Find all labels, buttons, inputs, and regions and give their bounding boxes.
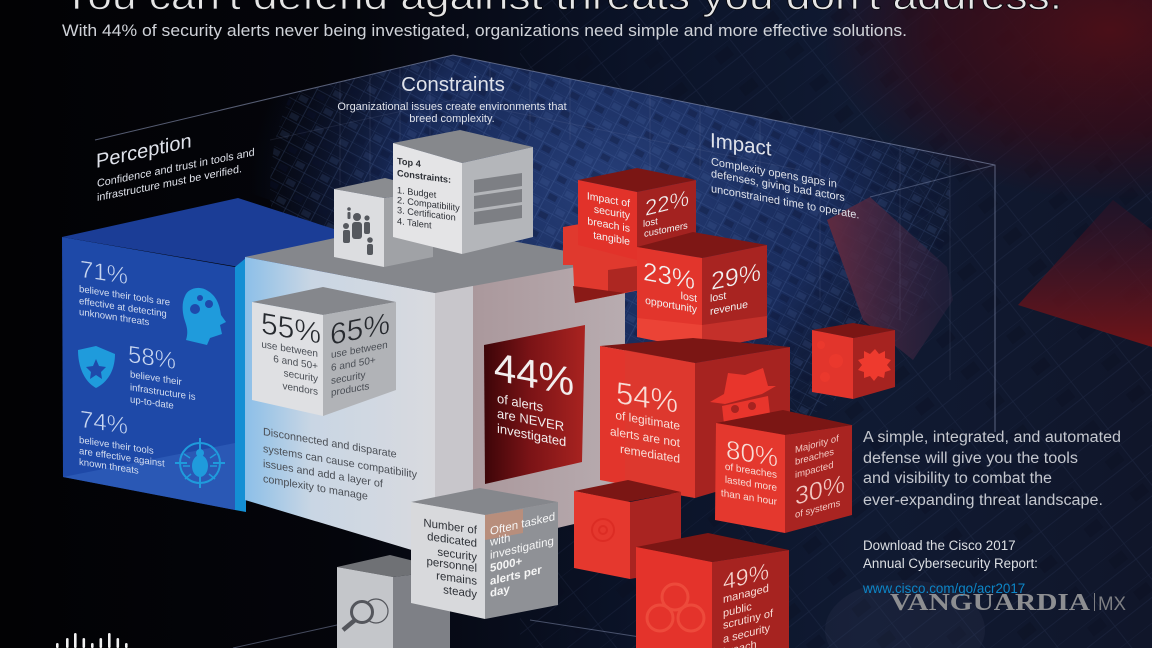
stat: 49%: a security <box>723 622 770 646</box>
stat: 23% <box>643 256 698 316</box>
closing statement: and visibility to combat the <box>863 470 1052 487</box>
cube: magnifier <box>337 555 450 648</box>
impact text: breach is <box>587 215 630 235</box>
cube: 49% <box>636 533 789 648</box>
stat: 71%: 71% <box>80 256 128 290</box>
stat: 65% <box>330 307 390 399</box>
personnel text <box>423 518 478 601</box>
stat: 80%: lasted more <box>725 475 777 494</box>
background <box>270 0 1152 648</box>
icon: bug in target <box>175 438 225 488</box>
stat: 29%: revenue <box>710 298 748 318</box>
stat: 55%: security <box>284 368 319 385</box>
callout: 44% of alerts: investigated <box>497 421 566 449</box>
stat: 71%: unknown threats <box>79 307 150 328</box>
body text: Disconnected and disparate <box>263 426 397 461</box>
stat: 80%: than an hour <box>721 488 778 508</box>
personnel text: dedicated <box>427 531 477 550</box>
stat: 74%: 74% <box>80 406 128 440</box>
stat: 23%: lost <box>681 290 697 305</box>
stat: 74%: believe their tools <box>79 435 154 457</box>
cube: 23% and 29% <box>637 232 767 350</box>
wireframe room <box>95 55 995 648</box>
stat: 54%: remediated <box>620 442 680 466</box>
stat: 23%: 23% <box>643 256 695 295</box>
stat: 30%: 30% <box>795 470 845 511</box>
stat: 54%: alerts are not <box>610 424 681 450</box>
body text: systems can cause compatibility <box>263 443 418 481</box>
icon: magnifier over brain <box>343 599 388 630</box>
stat: 71%: effective at detecting <box>79 296 167 320</box>
stat: 30%: of systems <box>795 498 840 521</box>
stat: 74% <box>79 406 165 481</box>
stat: 65%: 6 and 50+ <box>331 355 376 374</box>
list text: 4. Talent <box>397 216 432 231</box>
icon: spy <box>710 368 776 424</box>
stat: 30% <box>795 433 845 521</box>
stat: 29% <box>710 258 761 318</box>
personnel text: security <box>437 546 477 564</box>
heading: impact: unconstrained time to operate. <box>711 183 859 222</box>
stat: 55%: 55% <box>261 307 321 351</box>
stat: 80%: 80% <box>726 434 778 473</box>
closing statement: ever-expanding threat landscape. <box>863 492 1103 509</box>
callout: 44% of alerts: of alerts <box>497 391 544 415</box>
list text <box>397 156 460 234</box>
stat: 74%: known threats <box>79 457 139 477</box>
body text: complexity to manage <box>263 473 368 503</box>
stat: 65%: use between <box>331 340 388 361</box>
download call to action: www.cisco.com/go/acr2017 <box>862 581 1025 596</box>
personnel text: personnel <box>427 556 477 575</box>
stat: 65%: 65% <box>330 307 390 352</box>
impact text <box>587 190 631 248</box>
stat: 29%: 29% <box>711 258 761 296</box>
heading: constraints: Organizational issues create environments that <box>337 101 567 113</box>
tasked text: investigating <box>490 534 554 562</box>
cisco logo <box>56 633 128 648</box>
stat: 55%: 6 and 50+ <box>273 354 318 372</box>
stat: 58%: up-to-date <box>130 394 174 412</box>
heading: constraints: Constraints <box>401 73 505 96</box>
panel: perception blue cube <box>62 198 337 512</box>
personnel text: Number of <box>423 518 478 537</box>
icon: server racks <box>474 173 522 225</box>
stat: 80% <box>721 434 778 508</box>
body text: issues and add a layer of <box>263 458 384 491</box>
panel: constraints big cube <box>245 222 625 557</box>
personnel text: steady <box>443 584 477 601</box>
stat: 49%: 49% <box>723 558 769 595</box>
tasked text: with <box>489 531 510 549</box>
heading: impact: Complexity opens gaps in <box>711 156 837 191</box>
heading: impact <box>710 129 859 222</box>
closing statement <box>863 429 1121 509</box>
stat: 80%: of breaches <box>725 462 777 481</box>
callout: 44% of alerts <box>484 325 585 484</box>
cube: 54% <box>600 338 790 498</box>
tasked text: day <box>490 582 510 600</box>
list text: 3. Certification <box>397 205 456 223</box>
cube: virus <box>812 323 895 399</box>
stat: 71% <box>79 256 170 332</box>
icon: people group <box>343 207 373 255</box>
stat: 29%: lost <box>710 290 726 305</box>
list text: Constraints: <box>397 168 451 185</box>
heading: constraints: breed complexity. <box>409 113 495 125</box>
tasked text: alerts per <box>490 563 542 588</box>
closing statement: A simple, integrated, and automated <box>863 429 1121 446</box>
tasked text: Often tasked <box>490 510 555 538</box>
stat: 30%: impacted <box>795 460 833 481</box>
stat: 58%: 58% <box>128 341 176 375</box>
impact text: Impact of <box>587 190 630 210</box>
cube: top 4 constraints <box>393 130 533 254</box>
heading: perception: Perception <box>96 130 192 173</box>
stat: 54%: of legitimate <box>615 408 680 433</box>
download call to action: Download the Cisco 2017 <box>863 538 1016 553</box>
cube: empty red <box>574 480 681 579</box>
list text: 2. Compatibility <box>397 195 460 213</box>
tasked text: 5000+ <box>490 555 522 575</box>
stat: 22%: customers <box>644 220 688 240</box>
impact text: security <box>594 204 631 222</box>
stat: 58%: infrastructure is <box>130 382 196 403</box>
cube: personnel <box>411 488 558 619</box>
stat: 54% <box>610 375 681 466</box>
stat: 58% <box>128 341 196 415</box>
stat: 49%: public <box>723 601 752 620</box>
download call to action <box>862 538 1038 596</box>
cube: people <box>334 178 433 267</box>
stat: 22% <box>643 185 689 240</box>
stat: 23%: opportunity <box>645 295 698 316</box>
icon: faint biohazard <box>592 519 614 541</box>
watermark: MX <box>1098 594 1126 615</box>
stat: 22%: 22% <box>645 185 689 221</box>
heading: impact: defenses, giving bad actors <box>711 168 845 204</box>
heading: impact: Impact <box>710 129 772 161</box>
stat: 55% <box>261 307 321 398</box>
icon: biohazard <box>647 584 704 631</box>
stat: 74%: are effective against <box>79 446 165 470</box>
tasked text <box>489 510 555 600</box>
heading: perception <box>96 130 255 204</box>
body text <box>263 426 418 511</box>
watermark: VANGUARDIA <box>890 589 1090 616</box>
stat: 49% <box>723 557 774 648</box>
heading: perception: infrastructure must be verified. <box>97 163 242 204</box>
closing statement: defense will give you the tools <box>863 450 1078 467</box>
stat: 65%: security <box>331 370 366 387</box>
icon: shield with star <box>78 346 115 388</box>
stat: 22%: lost <box>643 216 658 230</box>
icon: malware <box>817 341 891 382</box>
personnel text: remains <box>436 570 477 588</box>
stat: 58%: believe their <box>130 369 182 388</box>
stat: 54%: 54% <box>616 375 678 420</box>
download call to action: Annual Cybersecurity Report: <box>863 556 1038 571</box>
stat: 49%: scrutiny of <box>723 607 774 632</box>
cube: 55% and 65% <box>252 287 396 416</box>
subtitle: With 44% of security alerts never being investigated, organizations need simple and more effective solutions. <box>62 22 907 40</box>
list text: 1. Budget <box>397 185 437 200</box>
impact text: tangible <box>593 229 630 248</box>
heading: perception: Confidence and trust in tools and <box>97 147 255 190</box>
icon: head with gears <box>183 288 226 345</box>
cube: impact of security breach <box>563 168 696 303</box>
stat: 71%: believe their tools are <box>79 284 170 309</box>
cube: 80% and 30% <box>715 410 852 533</box>
list text: Top 4 <box>397 156 422 169</box>
stat: 55%: use between <box>261 339 318 360</box>
callout: 44% of alerts: 44% <box>494 343 574 405</box>
callout: 44% of alerts: are NEVER <box>497 406 564 434</box>
stat: 30%: breaches <box>795 447 834 468</box>
stat: 30%: Majority of <box>795 433 839 456</box>
heading: constraints <box>337 73 567 125</box>
stat: 65%: products <box>331 381 369 399</box>
stat: 55%: vendors <box>282 381 318 398</box>
stat: 49%: managed <box>723 583 769 606</box>
